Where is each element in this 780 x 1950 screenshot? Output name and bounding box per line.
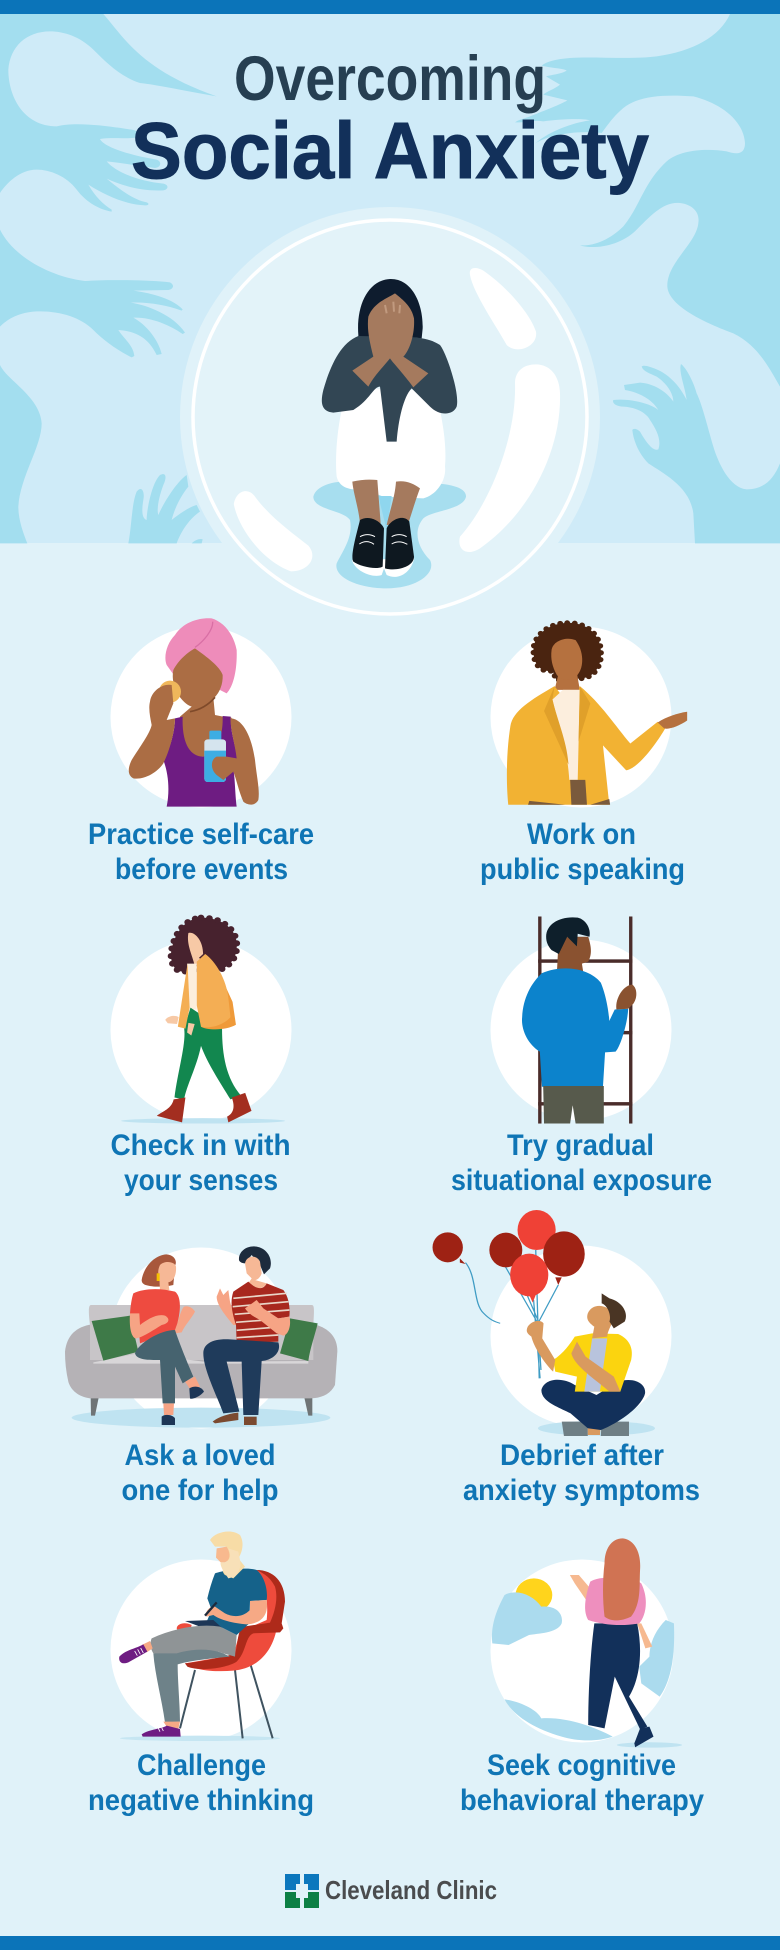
bubble with anxious figure xyxy=(180,207,600,627)
label: cognitive behavioral therapy: behavioral therapy xyxy=(460,1784,704,1817)
header background with reaching hands xyxy=(0,14,780,543)
label: check in with senses: your senses xyxy=(124,1164,278,1197)
label: debrief: Debrief after xyxy=(500,1439,664,1472)
label: challenge negative thinking: negative thinking xyxy=(88,1784,314,1817)
icon: woman looking at sky and clouds xyxy=(492,1538,682,1748)
icon: man writing in a red chair xyxy=(119,1531,285,1741)
icon: woman with towel turban and water bottle xyxy=(129,618,259,807)
label: ask a loved one: one for help xyxy=(122,1474,278,1507)
title xyxy=(131,44,649,195)
title: Social Anxiety xyxy=(131,106,649,195)
icon: balloons and seated man xyxy=(433,1210,655,1436)
label: gradual exposure: situational exposure xyxy=(451,1164,712,1197)
label: public speaking: public speaking xyxy=(480,853,685,886)
label: gradual exposure: Try gradual xyxy=(507,1129,654,1162)
icon: woman walking xyxy=(121,918,285,1124)
figure hiding her face xyxy=(313,279,466,588)
label: ask a loved one: Ask a loved xyxy=(124,1439,276,1472)
icon: woman in yellow blazer presenting xyxy=(507,623,687,805)
logo: Cleveland Clinic: Cleveland Clinic xyxy=(325,1875,497,1905)
label: cognitive behavioral therapy: Seek cognitive xyxy=(487,1749,676,1782)
logo: Cleveland Clinic xyxy=(285,1874,497,1908)
icon: man climbing a ladder xyxy=(522,916,636,1124)
title: Overcoming xyxy=(234,44,546,114)
label: public speaking: Work on xyxy=(527,818,636,851)
icon: couple talking on a sofa xyxy=(65,1246,337,1428)
label: practice self-care: before events xyxy=(115,853,288,886)
label: practice self-care: Practice self-care xyxy=(88,818,314,851)
label: check in with senses: Check in with xyxy=(110,1129,290,1162)
label: challenge negative thinking: Challenge xyxy=(137,1749,266,1782)
white circles behind figures xyxy=(110,626,674,1742)
label: debrief: anxiety symptoms xyxy=(463,1474,700,1507)
